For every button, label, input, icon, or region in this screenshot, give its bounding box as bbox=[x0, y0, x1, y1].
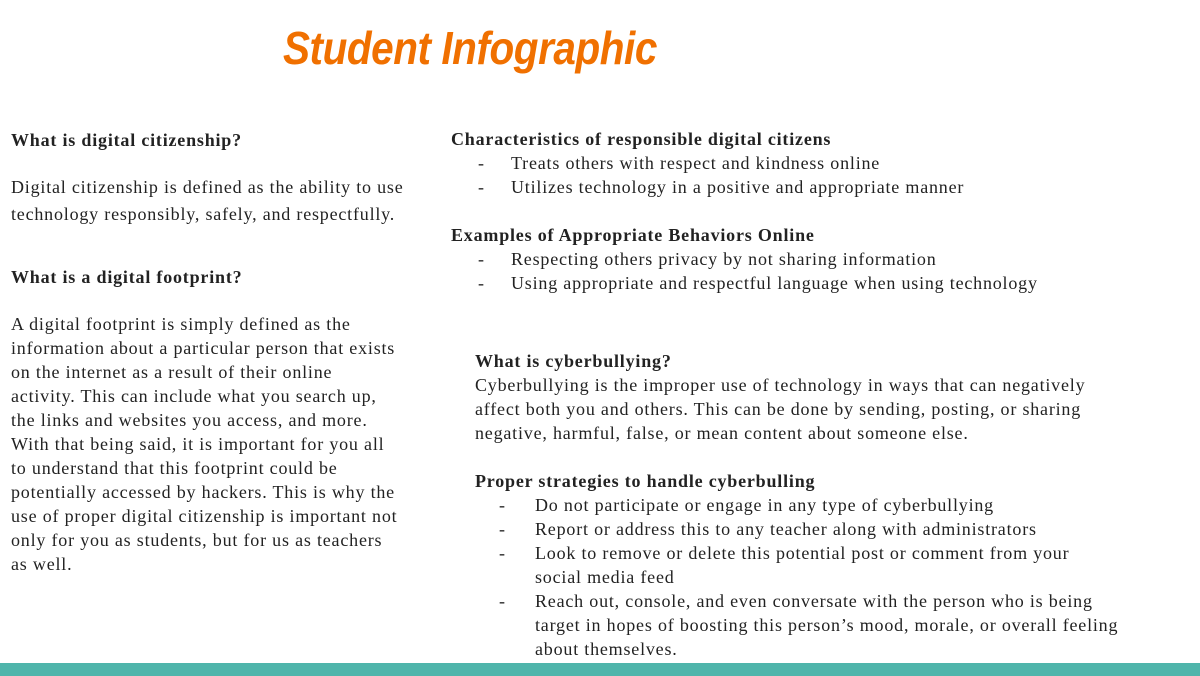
list: examples: - bbox=[478, 249, 485, 269]
text: cyberbullying definition: negative, harmful, false, or mean content about someone else. bbox=[475, 423, 969, 443]
text: footprint definition: potentially accessed by hackers. This is why the bbox=[11, 482, 395, 502]
list: characteristics: - bbox=[478, 153, 485, 173]
panel: right column: social media feed bbox=[535, 567, 675, 587]
text: cyberbullying definition bbox=[475, 375, 1085, 443]
text: footprint definition: as well. bbox=[11, 554, 72, 574]
text: footprint definition: on the internet as a result of their online bbox=[11, 362, 332, 382]
text: cyberbullying definition: Cyberbullying is the improper use of technology in ways that can negatively bbox=[475, 375, 1085, 395]
panel: right column: Reach out, console, and even conversate with the person who is being bbox=[535, 591, 1093, 611]
text: footprint definition: information about a particular person that exists bbox=[11, 338, 395, 358]
panel: right column: Report or address this to any teacher along with administrators bbox=[535, 519, 1037, 539]
panel: right column: Utilizes technology in a positive and appropriate manner bbox=[511, 177, 964, 197]
panel: right column: Look to remove or delete this potential post or comment from your bbox=[535, 543, 1069, 563]
heading: digital citizenship: What is digital citizenship? bbox=[11, 130, 242, 150]
list: examples: - bbox=[478, 273, 485, 293]
panel: right column: Do not participate or engage in any type of cyberbullying bbox=[535, 495, 994, 515]
list: examples bbox=[478, 249, 485, 293]
text: footprint definition: the links and websites you access, and more. bbox=[11, 410, 368, 430]
text: footprint definition: A digital footprint is simply defined as the bbox=[11, 314, 351, 334]
heading: digital footprint: What is a digital footprint? bbox=[11, 267, 242, 287]
text: footprint definition: activity. This can include what you search up, bbox=[11, 386, 377, 406]
text: citizenship definition bbox=[11, 177, 404, 224]
text: footprint definition: to understand that this footprint could be bbox=[11, 458, 338, 478]
list: strategies: - bbox=[499, 519, 506, 539]
text: citizenship definition: Digital citizenship is defined as the ability to use bbox=[11, 177, 404, 197]
title: Student Infographic bbox=[283, 22, 657, 74]
panel: right column bbox=[451, 129, 1118, 659]
list: strategies: - bbox=[499, 591, 506, 611]
panel: right column: Treats others with respect and kindness online bbox=[511, 153, 880, 173]
panel: right column: target in hopes of boosting this person’s mood, morale, or overall feeling bbox=[535, 615, 1118, 635]
panel: right column: Using appropriate and respectful language when using technology bbox=[511, 273, 1038, 293]
heading: examples: Examples of Appropriate Behaviors Online bbox=[451, 225, 815, 245]
text: citizenship definition: technology responsibly, safely, and respectfully. bbox=[11, 204, 395, 224]
list: strategies: - bbox=[499, 495, 506, 515]
list: strategies: - bbox=[499, 543, 506, 563]
text: footprint definition: only for you as students, but for us as teachers bbox=[11, 530, 382, 550]
panel: right column: about themselves. bbox=[535, 639, 678, 659]
text: footprint definition bbox=[11, 314, 397, 574]
heading: characteristics: Characteristics of responsible digital citizens bbox=[451, 129, 831, 149]
heading: cyberbullying: What is cyberbullying? bbox=[475, 351, 672, 371]
text: footprint definition: With that being said, it is important for you all bbox=[11, 434, 384, 454]
list: characteristics: - bbox=[478, 177, 485, 197]
text: cyberbullying definition: affect both you and others. This can be done by sending, posting, or sharing bbox=[475, 399, 1081, 419]
list: strategies bbox=[499, 495, 506, 611]
list: characteristics bbox=[478, 153, 485, 197]
panel: left column bbox=[11, 130, 404, 574]
footer bar bbox=[0, 663, 1200, 676]
heading: strategies: Proper strategies to handle cyberbulling bbox=[475, 471, 815, 491]
text: footprint definition: use of proper digital citizenship is important not bbox=[11, 506, 397, 526]
panel: right column: Respecting others privacy by not sharing information bbox=[511, 249, 937, 269]
